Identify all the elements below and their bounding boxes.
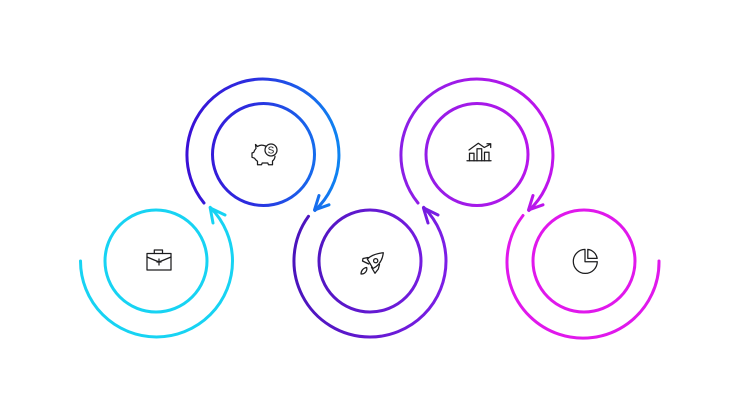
- icon: piggy bank: [252, 144, 277, 165]
- step 5: pie chart: [507, 210, 659, 338]
- inner circle, step 2: [212, 104, 314, 206]
- outer arrow ring, step 2: [187, 79, 339, 210]
- inner circle, step 3: [319, 210, 421, 312]
- step 4: growth chart: [401, 79, 553, 210]
- outer arrow ring, step 1: [80, 207, 232, 337]
- icon: piggy bank: S: [268, 146, 275, 157]
- outer arrow ring, step 4: [401, 79, 553, 210]
- step 2: piggy bank: [187, 79, 339, 210]
- inner circle, step 4: [426, 104, 528, 206]
- icon: pie chart: [573, 249, 597, 273]
- icon: growth chart: [467, 143, 491, 161]
- icon: briefcase: [147, 250, 171, 270]
- outer arrow ring, step 3: [294, 207, 446, 337]
- icon: rocket: [361, 253, 383, 274]
- outer arc, step 5: [507, 216, 659, 338]
- inner circle, step 5: [533, 210, 635, 312]
- step 3: rocket: [294, 207, 446, 337]
- inner circle, step 1: [105, 210, 207, 312]
- step 1: briefcase: [80, 207, 232, 337]
